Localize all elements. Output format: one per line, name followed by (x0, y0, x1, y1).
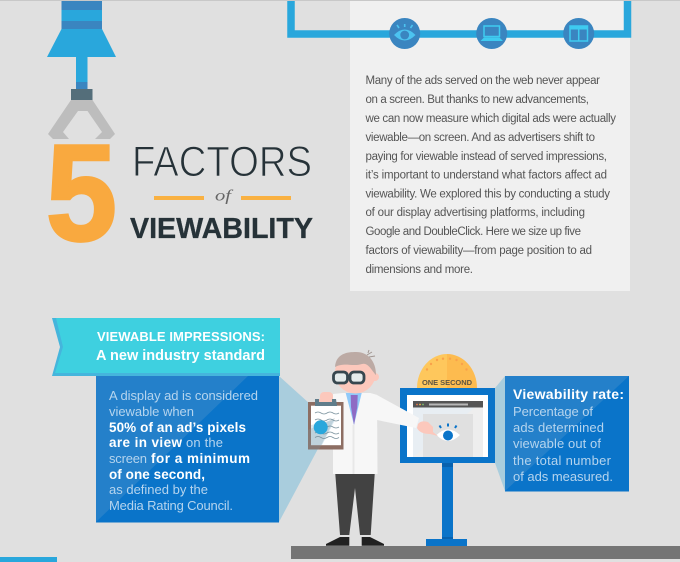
panel: viewability rate (505, 376, 629, 492)
panel: definition of viewable: screen (109, 451, 147, 466)
panel: introduction background (350, 1, 630, 291)
panel: definition of viewable: are in view (109, 435, 182, 450)
panel: definition of viewable: viewable when (109, 404, 194, 419)
panel: definition of viewable: A display ad is considered (109, 388, 258, 403)
banner: viewable impressions (52, 318, 280, 376)
heading: FACTORS: FACTORS (132, 138, 312, 186)
icon: browser window badge (563, 18, 594, 49)
panel: viewability rate: ads determined (513, 420, 604, 435)
illustration: pointing arm and hand (370, 393, 438, 436)
panel: viewability rate: the total number (513, 453, 612, 468)
panel: definition of viewable: 50% of an ad’s pixels (109, 420, 246, 435)
illustration: monitor on stand (400, 388, 495, 546)
panel: definition of viewable: Media Rating Council. (109, 498, 233, 513)
text block: introduction: it’s important to understand what factors affect ad (366, 170, 607, 182)
banner: viewable impressions: A new industry standard (96, 348, 265, 364)
illustration: analyst with clipboard (308, 350, 384, 546)
text block: introduction: we can now measure which digital ads were actually (364, 113, 616, 125)
text block: introduction (364, 75, 616, 276)
text block: introduction: viewability. We explored this by conducting a study (366, 188, 610, 200)
panel: definition of viewable (96, 376, 279, 522)
light beam: from monitor to viewability box (495, 376, 505, 491)
icon: one second dial (417, 354, 477, 388)
panel: definition of viewable: of one second, (109, 467, 205, 482)
frame: blue connector line (291, 1, 628, 34)
text block: introduction: viewable—on screen. And as advertisers shift to (366, 132, 595, 144)
panel: viewability rate: Percentage of (513, 404, 593, 419)
text block: introduction: factors of viewability—from page position to ad (366, 245, 592, 257)
heading: of with rules: of (215, 188, 234, 204)
text block: introduction: paying for viewable instead of served impressions, (366, 151, 607, 163)
banner: viewable impressions: VIEWABLE IMPRESSIONS: (97, 329, 265, 344)
text block: introduction: of our display advertising platforms, including (366, 207, 585, 219)
heading: of with rules (154, 188, 291, 204)
text block: introduction: on a screen. But thanks to new advancements, (366, 94, 589, 106)
heading: big number 5: 5 (46, 117, 117, 270)
text block: introduction: Google and DoubleClick. Here we size up five (366, 226, 581, 238)
heading: VIEWABILITY: VIEWABILITY (130, 213, 313, 245)
icon: one second dial: ONE SECOND (422, 378, 473, 387)
text block: introduction: dimensions and more. (366, 264, 473, 276)
panel: viewability rate: of ads measured. (513, 469, 613, 484)
panel: definition of viewable: on the (186, 435, 223, 450)
icon: laptop badge (476, 18, 507, 49)
text block: introduction: Many of the ads served on the web never appear (366, 75, 600, 87)
panel: viewability rate: Viewability rate: (513, 386, 624, 402)
icon: eye badge (389, 18, 420, 49)
floor (291, 546, 680, 559)
decorative bar: bottom left (0, 557, 57, 562)
panel: definition of viewable: for a minimum (151, 451, 250, 466)
icon: crane claw (47, 1, 116, 139)
panel: viewability rate: viewable out of (513, 436, 601, 451)
panel: definition of viewable: as defined by the (109, 482, 208, 497)
light beam: from clipboard to definition box (279, 376, 320, 522)
